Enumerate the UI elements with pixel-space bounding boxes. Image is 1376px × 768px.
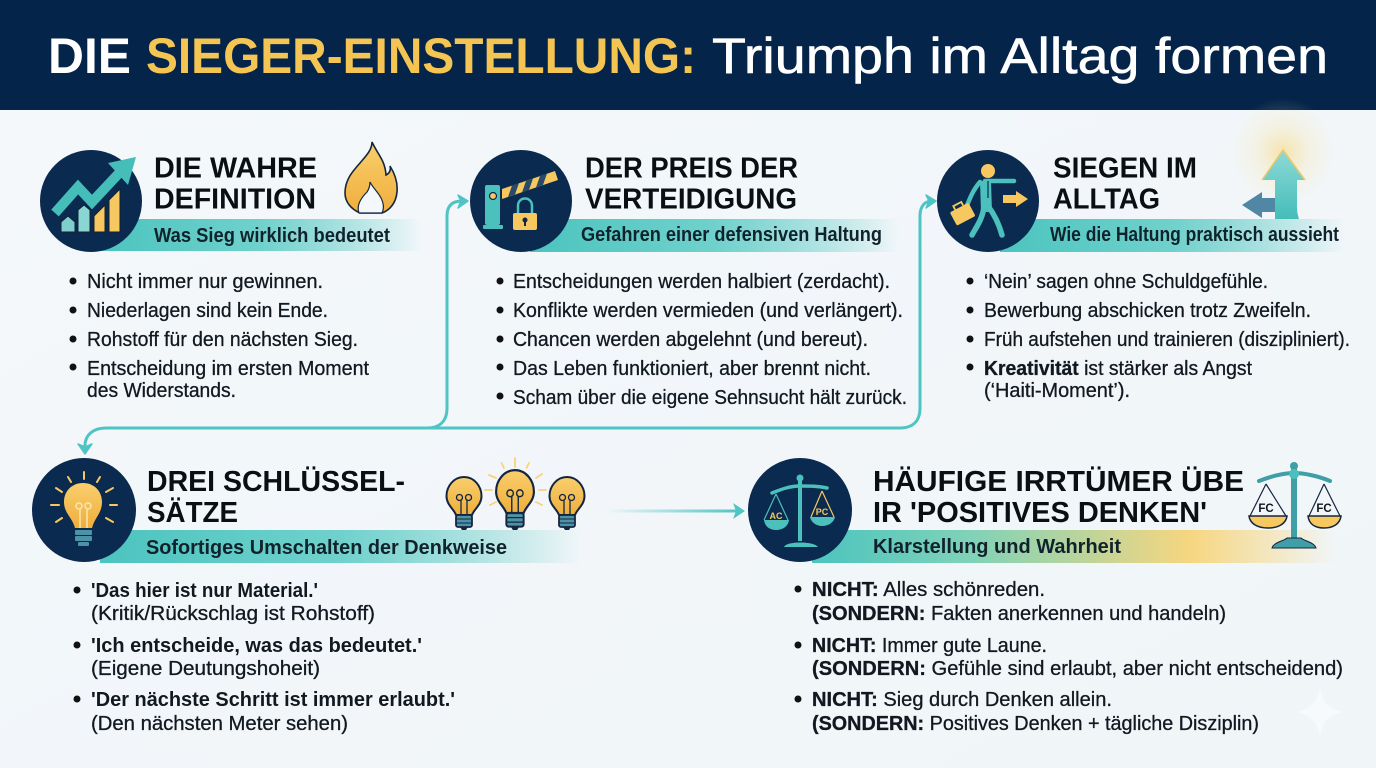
heading: ALLTAG xyxy=(1053,184,1160,216)
subtitle: Was Sieg wirklich bedeutet xyxy=(154,225,390,247)
glow behind up arrow xyxy=(1229,98,1337,206)
panel: drei schlüsselsätze xyxy=(32,458,584,735)
heading: HÄUFIGE IRRTÜMER ÜBE xyxy=(873,465,1244,498)
bullet list: ‘Nein’ sagen ohne Schuldgefühle. xyxy=(984,270,1268,293)
icon: light bulb xyxy=(32,458,136,562)
header banner xyxy=(0,0,1376,110)
subtitle band xyxy=(530,219,900,252)
flow arrows connecting panels xyxy=(78,195,936,454)
bullet list: 'Ich entscheide, was das bedeutet.' xyxy=(91,634,422,657)
bullet list: Bewerbung abschicken trotz Zweifeln. xyxy=(984,299,1311,322)
bullet list xyxy=(496,270,907,409)
bullet list: (‘Haiti-Moment’). xyxy=(984,379,1130,402)
bullet list: Rohstoff für den nächsten Sieg. xyxy=(87,328,358,351)
icon: scales AC PC: AC xyxy=(770,511,783,521)
heading: IR 'POSITIVES DENKEN' xyxy=(873,497,1207,529)
bullet list: (SONDERN: Fakten anerkennen und handeln) xyxy=(812,602,1226,625)
subtitle band xyxy=(1000,219,1345,252)
bullet list: Chancen werden abgelehnt (und bereut). xyxy=(513,328,868,351)
subtitle band xyxy=(100,219,422,251)
heading: SIEGEN IM xyxy=(1053,152,1197,184)
bullet list: (Den nächsten Meter sehen) xyxy=(91,712,348,735)
icon: scales AC PC xyxy=(748,458,852,562)
subtitle band xyxy=(812,530,1337,563)
heading: DEFINITION xyxy=(154,184,316,216)
icon: scales AC PC: PC xyxy=(816,507,829,517)
subtitle: Gefahren einer defensiven Haltung xyxy=(581,224,882,246)
bullet list: Das Leben funktioniert, aber brennt nicht. xyxy=(513,357,871,380)
bullet list: NICHT: Immer gute Laune. xyxy=(812,634,1047,657)
bullet list xyxy=(74,579,455,735)
heading xyxy=(585,152,798,216)
bullet list: (SONDERN: Positives Denken + tägliche Disziplin) xyxy=(812,712,1259,735)
bullet list: Kreativität ist stärker als Angst xyxy=(984,357,1252,380)
title: SIEGER-EINSTELLUNG: xyxy=(146,28,696,84)
bullet list: Entscheidung im ersten Moment xyxy=(87,357,369,380)
subtitle band xyxy=(100,530,582,563)
subtitle: Klarstellung und Wahrheit xyxy=(873,536,1121,558)
icon: sparkle watermark xyxy=(1296,688,1344,736)
heading xyxy=(147,465,405,529)
bullet list: NICHT: Sieg durch Denken allein. xyxy=(812,688,1112,711)
arrow: panel four to panel five xyxy=(605,503,745,519)
panel: die wahre definition xyxy=(40,142,422,402)
subtitle: Wie die Haltung praktisch aussieht xyxy=(1050,224,1339,246)
bullet list: (Kritik/Rückschlag ist Rohstoff) xyxy=(91,602,375,625)
bullet list: Nicht immer nur gewinnen. xyxy=(87,270,323,293)
title: Triumph im Alltag formen xyxy=(712,28,1328,84)
bullet list: NICHT: Alles schönreden. xyxy=(812,578,1045,601)
bullet list: 'Das hier ist nur Material.' xyxy=(91,579,318,602)
bullet list xyxy=(966,270,1350,402)
panel: häufige irrtümer xyxy=(748,458,1343,735)
subtitle: Sofortiges Umschalten der Denkweise xyxy=(146,537,507,559)
panel: der preis der verteidigung xyxy=(470,150,907,409)
bullet list: (SONDERN: Gefühle sind erlaubt, aber nicht entscheidend) xyxy=(812,657,1343,680)
heading: VERTEIDIGUNG xyxy=(585,184,797,216)
icon: scales FC FC: FC xyxy=(1258,503,1274,515)
icon: growth chart xyxy=(40,150,142,252)
panel: siegen im alltag xyxy=(937,98,1350,402)
heading: DER PREIS DER xyxy=(585,152,798,184)
icon: scales FC FC: FC xyxy=(1316,503,1332,515)
heading xyxy=(1053,152,1197,216)
heading xyxy=(873,465,1244,529)
bullet list: Niederlagen sind kein Ende. xyxy=(87,299,328,322)
icon: walking person with briefcase xyxy=(937,150,1039,252)
title xyxy=(48,28,1328,84)
heading xyxy=(154,152,317,216)
bullet list: Konflikte werden vermieden (und verlängert). xyxy=(513,299,903,322)
icon: scales FC FC xyxy=(1249,462,1341,548)
icon: barrier and padlock xyxy=(470,150,572,252)
icon: flame xyxy=(345,142,397,213)
bullet list: Scham über die eigene Sehnsucht hält zurück. xyxy=(513,386,907,409)
title: DIE xyxy=(48,28,131,84)
heading: DIE WAHRE xyxy=(154,152,317,184)
bullet list xyxy=(70,270,369,402)
bullet list: Entscheidungen werden halbiert (zerdacht). xyxy=(513,270,890,293)
icon: paths, up and back xyxy=(1242,150,1305,219)
heading: SÄTZE xyxy=(147,496,238,529)
bullet list: 'Der nächste Schritt ist immer erlaubt.' xyxy=(91,688,455,711)
bullet list: Früh aufstehen und trainieren (diszipliniert). xyxy=(984,328,1350,351)
icon: three light bulbs xyxy=(446,458,584,530)
bullet list: (Eigene Deutungshoheit) xyxy=(91,657,320,680)
bullet list xyxy=(794,578,1343,735)
bullet list: des Widerstands. xyxy=(87,379,236,402)
heading: DREI SCHLÜSSEL- xyxy=(147,465,405,498)
